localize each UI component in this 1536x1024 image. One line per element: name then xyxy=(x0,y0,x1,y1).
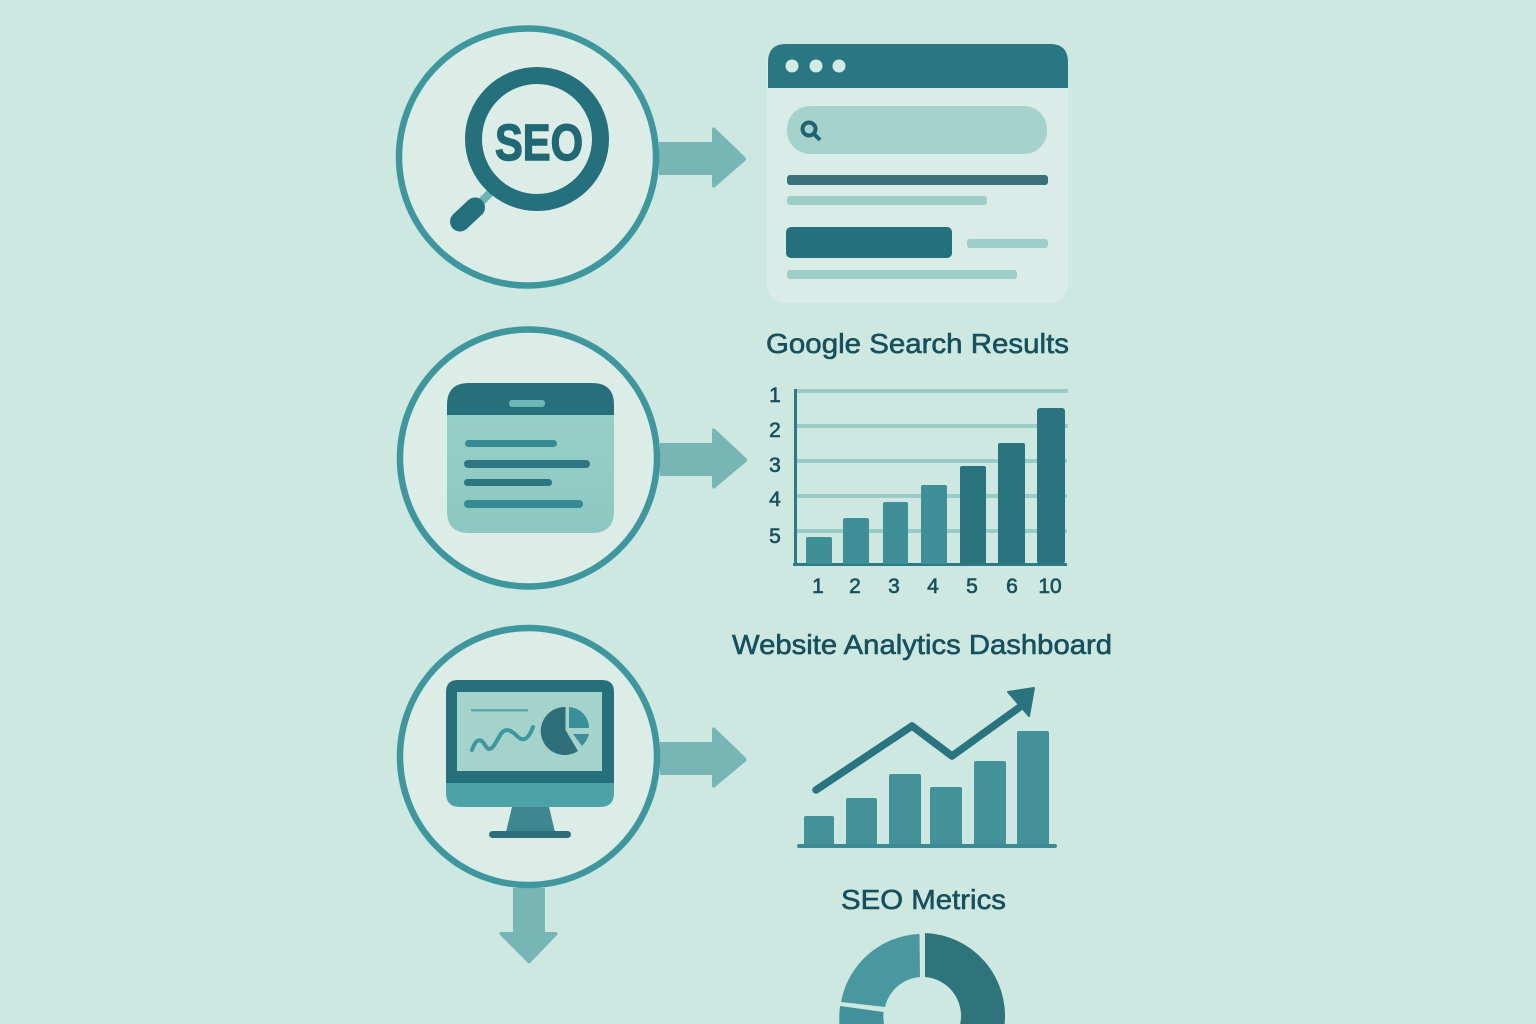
arrow: monitor to metrics xyxy=(660,727,746,788)
bar chart: rankings: 4 xyxy=(769,488,781,511)
bar chart: rankings: 1 xyxy=(769,384,781,407)
icon: SEO magnifier in circle: SEO xyxy=(495,114,583,171)
bar chart: rankings: 4 xyxy=(927,575,939,598)
bar chart: rankings: 2 xyxy=(769,419,781,442)
donut chart xyxy=(839,933,1005,1024)
bar chart: rankings: 1 xyxy=(812,575,824,598)
bar chart: rankings: 3 xyxy=(769,454,781,477)
bar chart: rankings xyxy=(769,384,1068,598)
bar chart: rankings: 5 xyxy=(769,525,781,548)
heading: SEO Metrics: SEO Metrics xyxy=(841,884,1006,915)
bar chart: rankings: 10 xyxy=(1038,575,1062,598)
heading: Website Analytics Dashboard: Website Analytics Dashboard xyxy=(732,629,1112,660)
icon: SEO magnifier in circle xyxy=(399,28,656,286)
arrow: page to ranking chart xyxy=(660,428,747,489)
chart: growth bars with trend arrow xyxy=(797,688,1057,848)
icon: web page in circle xyxy=(400,330,657,586)
arrow: down from monitor xyxy=(499,888,558,964)
bar chart: rankings: 6 xyxy=(1006,575,1018,598)
icon: analytics monitor in circle xyxy=(400,628,657,885)
bar chart: rankings: 2 xyxy=(849,575,861,598)
bar chart: rankings: 5 xyxy=(966,575,978,598)
panel: browser search results mockup xyxy=(767,44,1068,303)
bar chart: rankings: 3 xyxy=(888,575,900,598)
heading: Google Search Results: Google Search Results xyxy=(766,328,1069,359)
arrow: SEO to search results xyxy=(659,127,746,188)
